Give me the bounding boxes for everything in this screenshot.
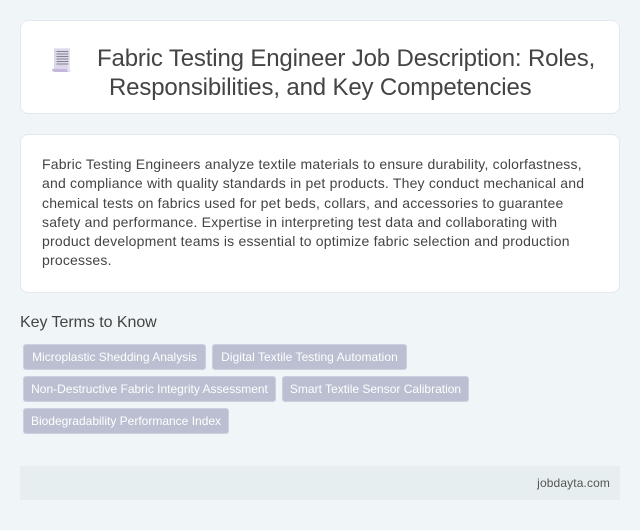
panel: title header bbox=[20, 20, 620, 114]
title bbox=[97, 45, 595, 101]
heading: key terms: Key Terms to Know bbox=[20, 314, 157, 331]
tag: digital textile testing automation: Digital Textile Testing Automation bbox=[221, 350, 398, 364]
description text: processes. bbox=[42, 252, 112, 268]
tag: microplastic shedding analysis: Microplastic Shedding Analysis bbox=[32, 350, 197, 364]
tag: smart textile sensor calibration: Smart Textile Sensor Calibration bbox=[290, 382, 461, 396]
description text: safety and performance. Expertise in interpreting test data and collaborating with bbox=[42, 214, 557, 230]
footer bar bbox=[20, 466, 620, 500]
description text bbox=[42, 156, 584, 268]
tag: biodegradability performance index bbox=[23, 408, 229, 434]
tag: non-destructive fabric integrity assessment: Non-Destructive Fabric Integrity Assessment bbox=[31, 382, 268, 396]
icon: document scroll bbox=[52, 48, 71, 72]
title: Responsibilities, and Key Competencies bbox=[109, 74, 532, 101]
panel: description bbox=[20, 134, 620, 293]
description text: and compliance with quality standards in pet products. They conduct mechanical and bbox=[42, 175, 584, 191]
tag: non-destructive fabric integrity assessment bbox=[23, 376, 276, 402]
tag: microplastic shedding analysis bbox=[23, 344, 206, 370]
description text: Fabric Testing Engineers analyze textile materials to ensure durability, colorfastness, bbox=[42, 156, 582, 172]
footer source text: jobdayta.com bbox=[537, 476, 610, 490]
description text: product development teams is essential to optimize fabric selection and production bbox=[42, 233, 570, 249]
tag: smart textile sensor calibration bbox=[282, 376, 469, 402]
description text: chemical tests on fabrics used for pet beds, collars, and accessories to guarantee bbox=[42, 195, 563, 211]
title: Fabric Testing Engineer Job Description: Roles, bbox=[97, 45, 595, 72]
tag: biodegradability performance index: Biodegradability Performance Index bbox=[31, 414, 221, 428]
tag: digital textile testing automation bbox=[212, 344, 407, 370]
